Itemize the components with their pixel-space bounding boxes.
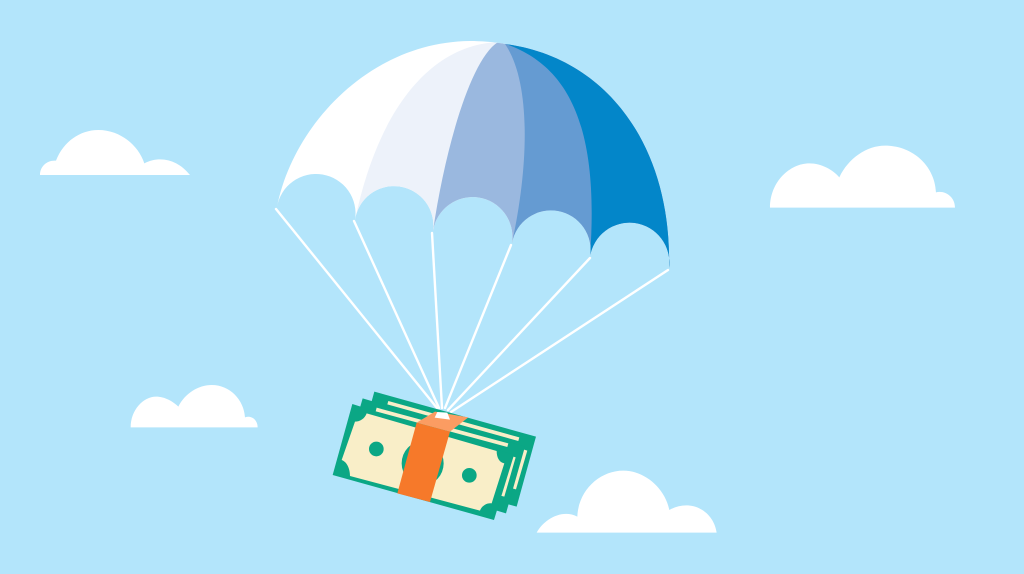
cloud: upper right: [770, 146, 955, 208]
knot: [435, 412, 450, 420]
cloud: upper left: [40, 130, 190, 175]
canopy panel: mid blue: [505, 44, 670, 268]
canopy panel: light blue: [433, 42, 670, 266]
cloud: lower left: [131, 385, 258, 427]
canopy: [278, 41, 670, 268]
canopy panel: pale: [356, 42, 497, 230]
front bill cream face: [342, 413, 504, 511]
middle bill strips: [376, 408, 508, 447]
money bundle: [333, 392, 536, 520]
parachute: [274, 41, 670, 413]
back bill: [355, 392, 536, 507]
band top: [417, 412, 468, 432]
front bill: [333, 404, 514, 520]
suspension lines: [276, 209, 668, 412]
bill dots: [369, 442, 384, 456]
back bill strips: [387, 401, 519, 441]
canopy panel: dark blue: [506, 44, 670, 268]
middle bill: [343, 398, 525, 513]
canopy panel: white: [278, 41, 556, 242]
cloud: lower right: [537, 471, 717, 533]
orange band: [397, 423, 450, 502]
